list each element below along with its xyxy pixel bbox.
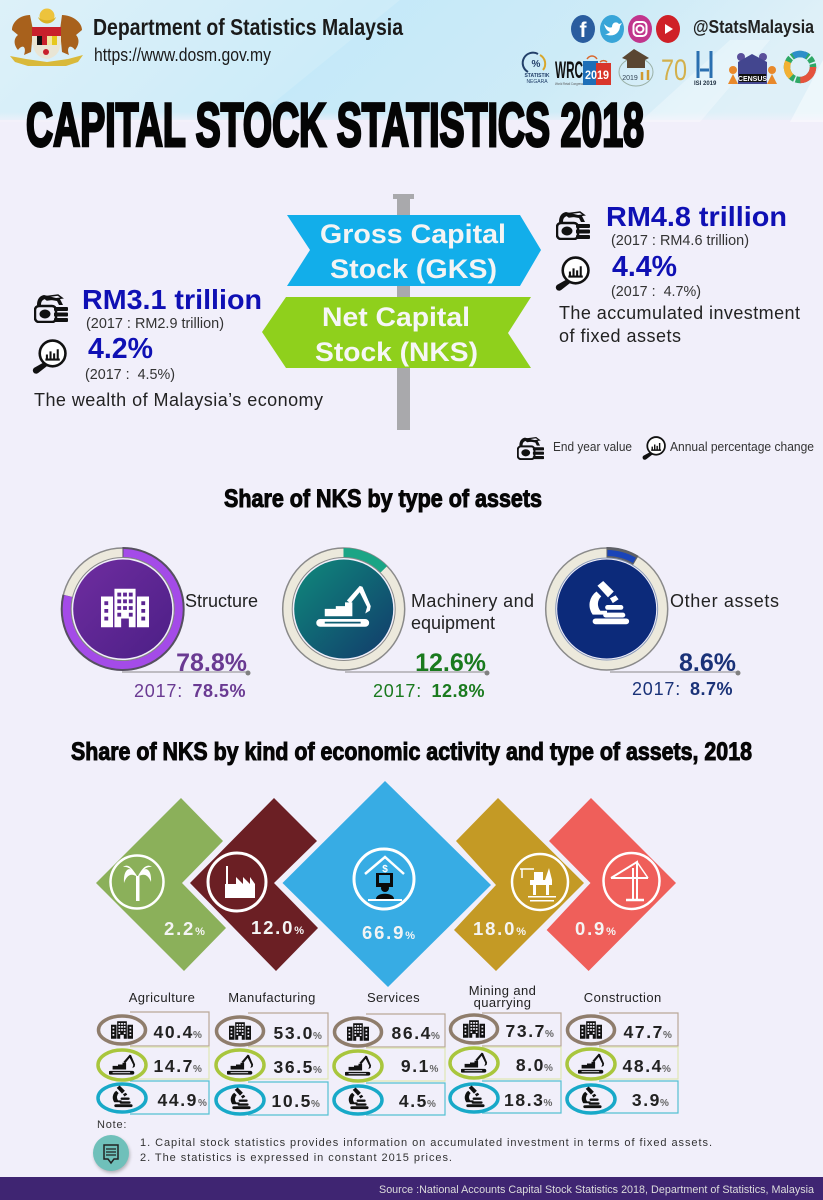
column labels: Agriculture bbox=[129, 990, 195, 1005]
table: agriculture: % bbox=[193, 1064, 202, 1075]
icon: factory bbox=[225, 866, 255, 898]
table: construction: % bbox=[662, 1064, 671, 1075]
table: agriculture: 14.7 bbox=[154, 1056, 194, 1076]
table: services: 4.5 bbox=[399, 1091, 428, 1111]
GKS statistics: of fixed assets bbox=[559, 326, 681, 346]
note label: Note: bbox=[97, 1119, 127, 1131]
NKS statistics: 4.2% bbox=[88, 333, 153, 365]
table: construction: % bbox=[660, 1098, 669, 1109]
legend: End year value bbox=[553, 439, 632, 454]
table: mining and quarrying: 73.7 bbox=[506, 1021, 546, 1041]
label: machinery and equipment: Machinery and bbox=[411, 591, 534, 611]
value: other assets: 2017: bbox=[632, 679, 681, 699]
table: mining and quarrying: 8.0 bbox=[516, 1055, 545, 1075]
value: other assets: 8.6% bbox=[679, 649, 736, 677]
organisation name: Department of Statistics Malaysia bbox=[93, 14, 403, 40]
value: machinery and equipment bbox=[345, 649, 490, 701]
table: construction: 47.7 bbox=[624, 1022, 664, 1042]
icon: note bbox=[93, 1135, 130, 1173]
value: structure bbox=[122, 649, 250, 701]
label: machinery and equipment bbox=[411, 591, 534, 633]
diamond: services bbox=[282, 781, 491, 987]
sign: Gross Capital Stock: Stock (GKS) bbox=[330, 254, 497, 284]
partner logos: 2019 bbox=[622, 75, 638, 82]
NKS statistics: (2017 : 4.5%) bbox=[85, 367, 175, 383]
notes bbox=[140, 1137, 712, 1164]
value: structure: 2017: bbox=[134, 681, 183, 701]
logo: Malaysian coat of arms bbox=[10, 8, 83, 66]
heading: share by type of assets: Share of NKS by type of assets bbox=[224, 485, 542, 513]
table: mining and quarrying: % bbox=[545, 1029, 554, 1040]
legend: Annual percentage change bbox=[670, 439, 814, 454]
header band bbox=[0, 0, 823, 124]
table: mining and quarrying: % bbox=[544, 1063, 553, 1074]
NKS statistics: RM3.1 trillion bbox=[82, 284, 262, 315]
sign: Net Capital Stock bbox=[262, 297, 531, 368]
table: agriculture: % bbox=[198, 1098, 207, 1109]
sign: Net Capital Stock: Stock (NKS) bbox=[315, 337, 478, 367]
table: construction: % bbox=[663, 1030, 672, 1041]
GKS statistics: (2017 : 4.7%) bbox=[611, 284, 701, 300]
GKS statistics: 4.4% bbox=[612, 251, 677, 283]
partner logos: % bbox=[532, 59, 541, 70]
table: services bbox=[334, 1014, 445, 1115]
notes: 2. The statistics is expressed in constant 2015 prices. bbox=[140, 1152, 452, 1164]
diamond: services: 66.9% bbox=[362, 922, 417, 943]
partner logos: 70 bbox=[661, 54, 687, 87]
diamond: agriculture bbox=[96, 798, 226, 971]
partner logos: World Retail Congress bbox=[555, 81, 583, 86]
sign: Net Capital Stock: Net Capital bbox=[322, 302, 470, 332]
sign: Gross Capital Stock bbox=[287, 215, 541, 286]
donut: structure bbox=[62, 548, 184, 670]
label: structure: Structure bbox=[185, 591, 258, 611]
notes: 1. Capital stock statistics provides information on accumulated investment in terms of fixed assets. bbox=[140, 1137, 712, 1149]
footer: Source :National Accounts Capital Stock Statistics 2018, Department of Statistics, Malaysia bbox=[379, 1184, 815, 1196]
column labels: Manufacturing bbox=[228, 990, 316, 1005]
table: mining and quarrying: 18.3 bbox=[504, 1090, 544, 1110]
value: other assets: 8.7% bbox=[690, 679, 733, 699]
table: mining and quarrying: % bbox=[544, 1098, 552, 1109]
label: machinery and equipment: equipment bbox=[411, 613, 495, 633]
table: construction: 48.4 bbox=[623, 1056, 663, 1076]
social media icons bbox=[571, 15, 680, 43]
value: machinery and equipment: 12.8% bbox=[431, 681, 485, 701]
diamond: mining and quarrying: 18.0% bbox=[473, 918, 528, 939]
table: agriculture bbox=[98, 1012, 209, 1114]
value: machinery and equipment: 12.6% bbox=[415, 649, 486, 677]
GKS statistics: The accumulated investment bbox=[559, 303, 800, 323]
table: manufacturing: % bbox=[313, 1065, 322, 1076]
website: https://www.dosm.gov.my bbox=[94, 45, 271, 65]
partner logos: NEGARA bbox=[526, 79, 548, 85]
value: structure: 78.8% bbox=[176, 649, 247, 677]
column labels: Services bbox=[367, 990, 420, 1005]
table: manufacturing: 10.5 bbox=[272, 1091, 312, 1111]
table: manufacturing: 53.0 bbox=[274, 1023, 314, 1043]
table: agriculture: 44.9 bbox=[158, 1090, 198, 1110]
signpost pole bbox=[393, 194, 414, 430]
NKS statistics bbox=[33, 284, 323, 410]
table: services: 9.1 bbox=[401, 1056, 430, 1076]
icon: oil rig bbox=[520, 868, 556, 902]
table: agriculture: 40.4 bbox=[154, 1022, 194, 1042]
table: services: 86.4 bbox=[392, 1023, 432, 1043]
table: construction bbox=[567, 1013, 678, 1113]
table: services: % bbox=[430, 1064, 438, 1075]
column labels: quarrying bbox=[474, 995, 531, 1010]
partner logos: ISI 2019 bbox=[694, 81, 717, 87]
table: mining and quarrying bbox=[450, 1013, 561, 1113]
column labels: Mining and bbox=[469, 983, 536, 998]
sign: Gross Capital Stock: Gross Capital bbox=[320, 219, 506, 249]
table: services: % bbox=[431, 1031, 440, 1042]
value: machinery and equipment: 2017: bbox=[373, 681, 422, 701]
label: other assets: Other assets bbox=[670, 591, 779, 611]
diamond: construction bbox=[547, 798, 676, 971]
partner logos: WRC bbox=[555, 57, 583, 84]
footer bbox=[0, 1177, 823, 1200]
diamond: manufacturing bbox=[190, 798, 318, 971]
NKS statistics: The wealth of Malaysia’s economy bbox=[34, 390, 323, 410]
table: agriculture: % bbox=[193, 1030, 202, 1041]
donut: machinery and equipment bbox=[283, 548, 405, 670]
legend bbox=[518, 437, 814, 460]
GKS statistics: (2017 : RM4.6 trillion) bbox=[611, 233, 749, 249]
table: services: % bbox=[427, 1099, 436, 1110]
partner logos: CENSUS bbox=[738, 76, 767, 83]
icon: service desk bbox=[365, 857, 404, 901]
icon: crane bbox=[611, 862, 648, 900]
social media icons: f bbox=[580, 19, 588, 42]
value: structure: 78.5% bbox=[192, 681, 246, 701]
NKS statistics: (2017 : RM2.9 trillion) bbox=[86, 316, 224, 332]
column labels: Construction bbox=[584, 990, 662, 1005]
table: manufacturing: 36.5 bbox=[274, 1057, 314, 1077]
diamond: construction: 0.9% bbox=[575, 918, 618, 939]
table: construction: 3.9 bbox=[632, 1090, 661, 1110]
column labels bbox=[129, 983, 662, 1010]
donut: other assets bbox=[546, 548, 668, 670]
icon: palm tree bbox=[123, 866, 152, 901]
table: manufacturing: % bbox=[313, 1031, 322, 1042]
table: manufacturing bbox=[216, 1013, 328, 1115]
partner logos: 2019 bbox=[585, 68, 609, 82]
partner logos bbox=[523, 49, 813, 87]
GKS statistics bbox=[556, 201, 800, 346]
partner logos: STATISTIK bbox=[524, 73, 550, 79]
diamond: mining and quarrying bbox=[454, 798, 584, 971]
value: other assets bbox=[610, 649, 740, 699]
icon: service desk: $ bbox=[382, 864, 388, 875]
table: manufacturing: % bbox=[311, 1099, 320, 1110]
GKS statistics: RM4.8 trillion bbox=[606, 201, 787, 232]
diamond: agriculture: 2.2% bbox=[164, 918, 207, 939]
diamond: manufacturing: 12.0% bbox=[251, 917, 306, 938]
